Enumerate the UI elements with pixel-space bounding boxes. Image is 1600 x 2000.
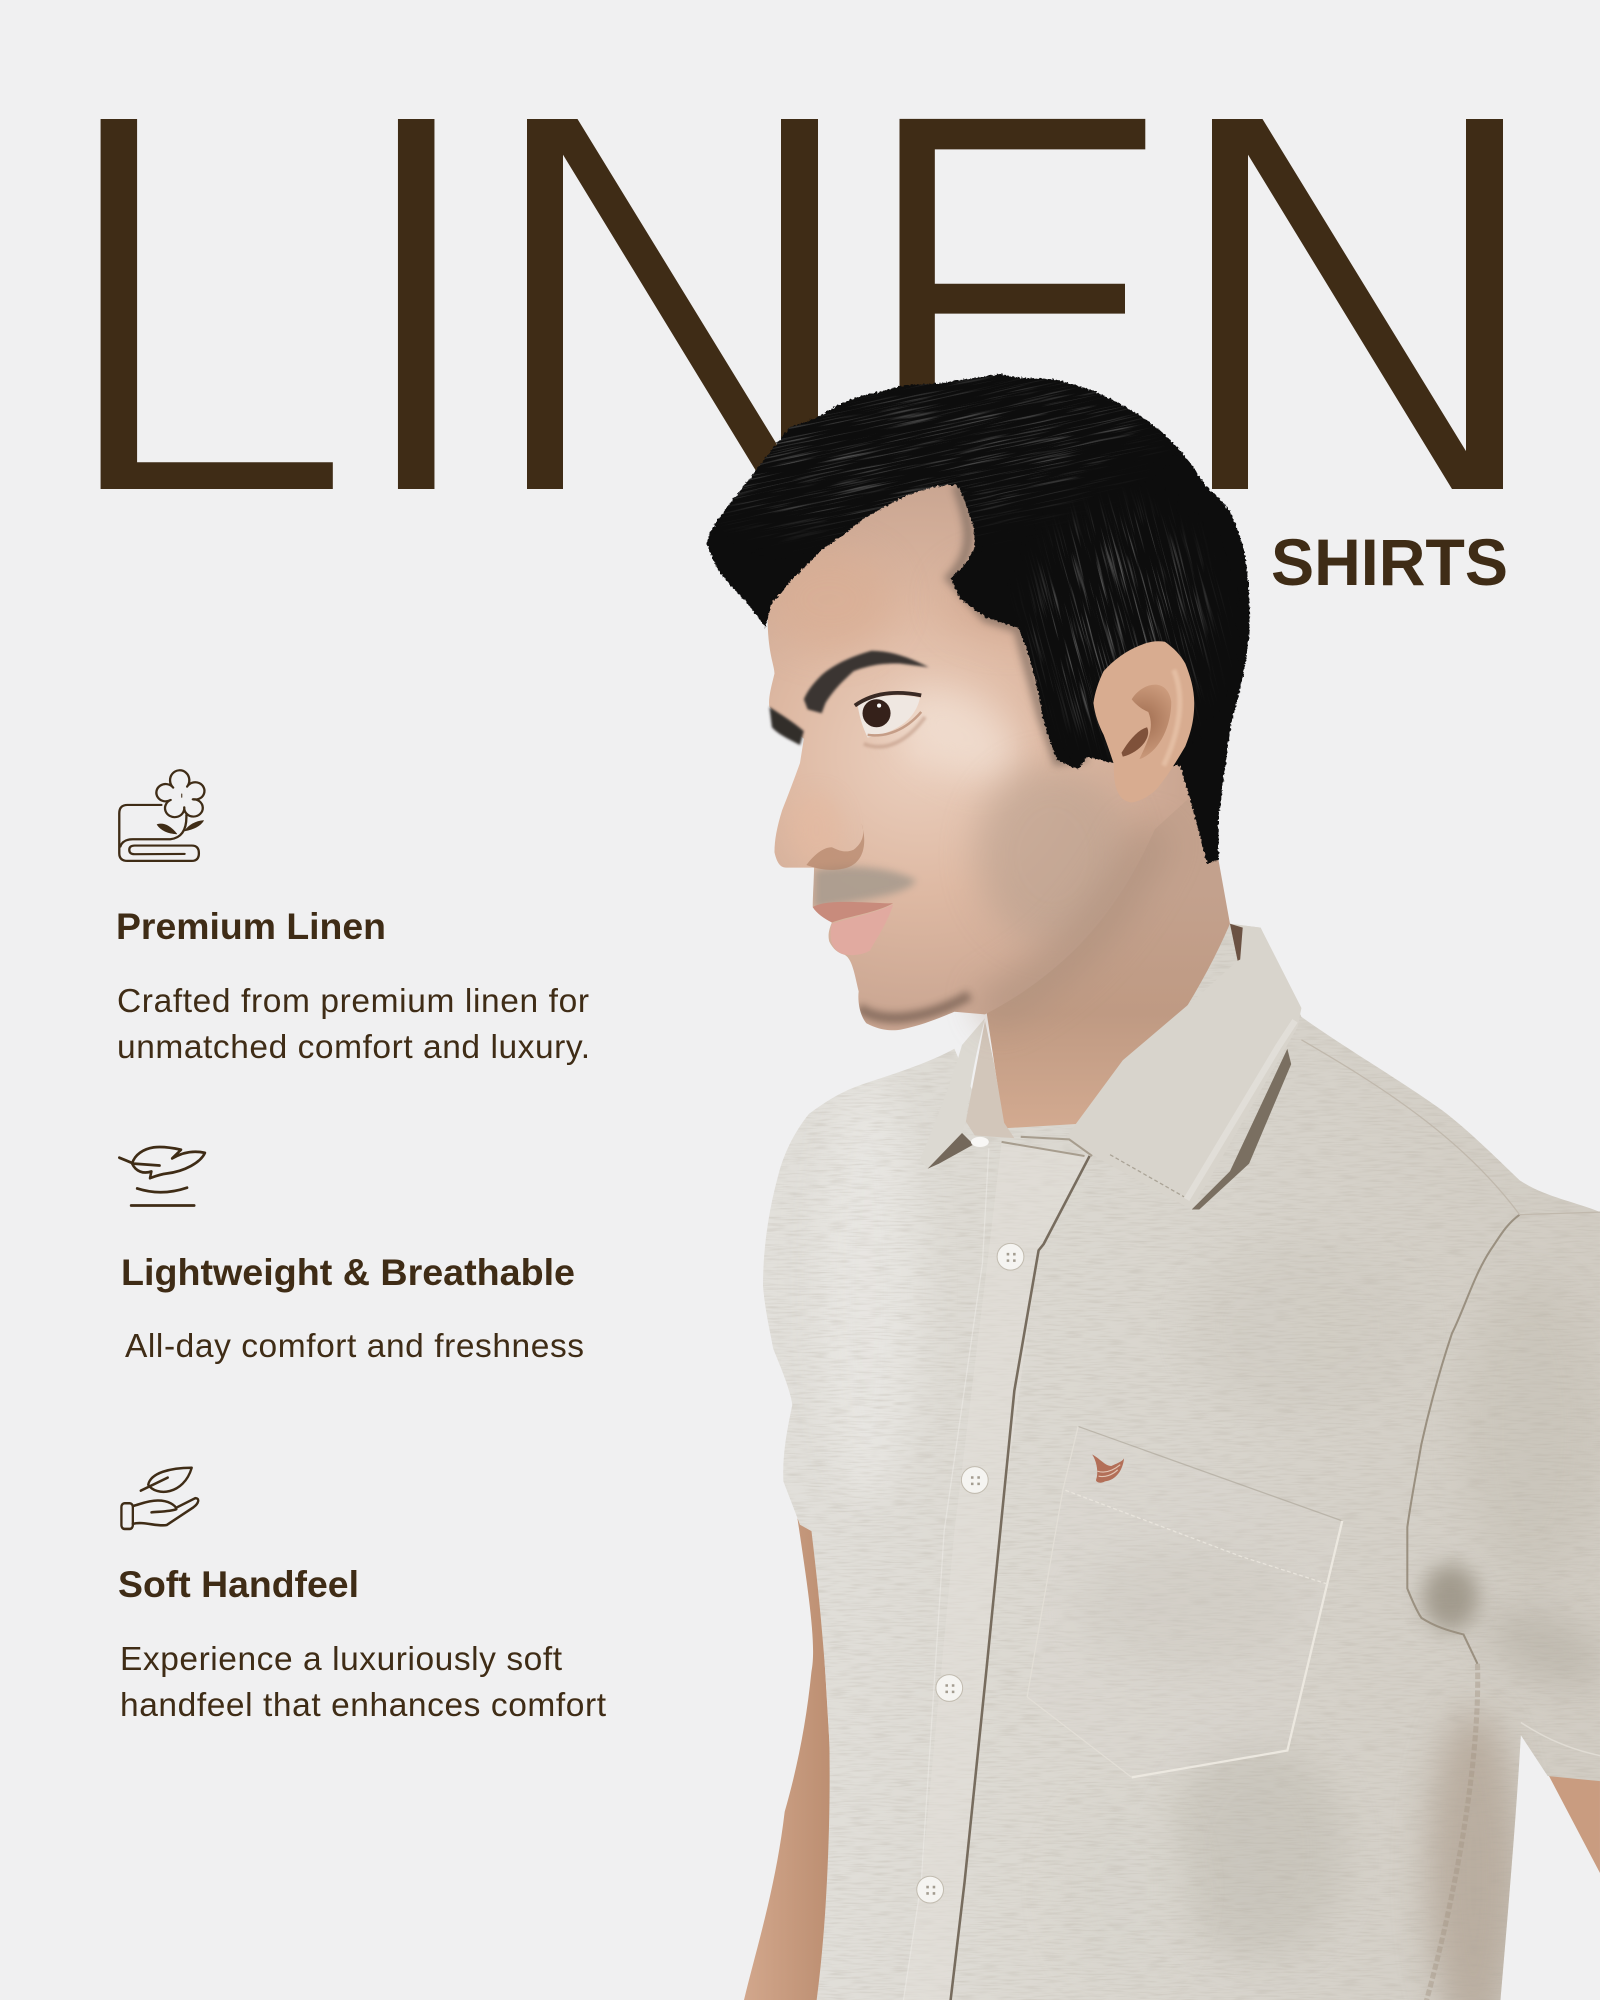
title: LINEN: N — [1163, 0, 1553, 614]
feature: Lightweight & Breathable — [119, 1147, 584, 1365]
side seam — [1426, 1664, 1478, 2000]
person photo — [706, 373, 1600, 2000]
far brow — [769, 707, 804, 745]
jaw blend — [985, 829, 1155, 1011]
nostril — [806, 823, 864, 870]
inner collar — [966, 1021, 1014, 1138]
eyebrow — [804, 651, 929, 713]
feature: Soft Handfeel — [118, 1468, 607, 1724]
icon: towel with flower — [119, 770, 204, 861]
left collar shadow — [928, 1133, 974, 1169]
text: premium linen description: unmatched comfort and luxury. — [117, 1029, 590, 1066]
title: LINEN: I — [338, 0, 494, 617]
neck — [985, 766, 1244, 1138]
text: premium linen description: Crafted from premium linen for — [117, 983, 589, 1020]
shirt — [753, 919, 1600, 2000]
title: LINEN: L — [46, 0, 360, 617]
logo embroidery — [1092, 1455, 1124, 1483]
subtitle: SHIRTS: SHIRTS — [1271, 526, 1508, 599]
placket band — [903, 1142, 1090, 2000]
text: soft handfeel description: Experience a luxuriously soft — [120, 1641, 563, 1678]
heading: Soft Handfeel: Soft Handfeel — [118, 1563, 359, 1605]
collar shadow — [1192, 1049, 1291, 1210]
icon: hand with leaf — [121, 1468, 198, 1529]
title: LINEN: E — [854, 0, 1181, 614]
fabric shading — [753, 919, 1600, 2000]
lips — [813, 902, 893, 955]
shirt body — [763, 924, 1600, 2000]
shoulder seam — [1301, 1040, 1600, 1215]
heading: Premium Linen: Premium Linen — [116, 905, 386, 947]
right collar — [1065, 924, 1301, 1210]
left arm — [744, 1518, 831, 2000]
skin shading — [812, 596, 1122, 1028]
eye — [855, 693, 925, 747]
pocket — [1027, 1426, 1342, 1777]
hair strands — [724, 376, 1223, 740]
buttons — [917, 1243, 1024, 1903]
collar stud — [971, 1137, 989, 1147]
left collar — [920, 1018, 985, 1169]
face — [768, 484, 1183, 1039]
placket — [951, 1156, 1090, 2000]
hair — [706, 373, 1250, 864]
icon: feather — [119, 1147, 205, 1205]
sleeve hem — [1521, 1722, 1600, 1756]
title: LINEN — [46, 0, 1553, 617]
text: lightweight description: All-day comfort and freshness — [125, 1328, 584, 1365]
heading: Lightweight & Breathable: Lightweight & Breathable — [121, 1251, 575, 1293]
title: LINEN: N — [478, 0, 868, 614]
feature: Premium Linen — [116, 770, 590, 1066]
right arm — [1548, 1774, 1600, 1873]
sleeve seam — [1407, 1215, 1520, 1664]
ear — [1093, 641, 1194, 803]
text: soft handfeel description: handfeel that enhances comfort — [120, 1687, 607, 1724]
